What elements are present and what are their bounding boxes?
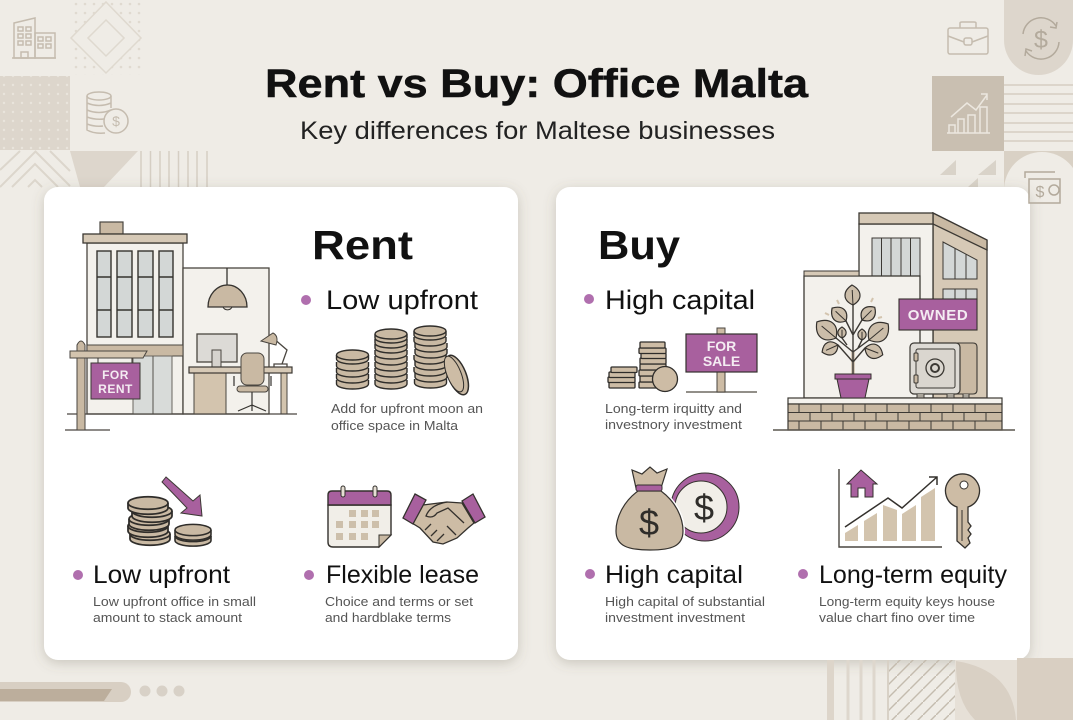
text: low upfront description — [331, 402, 483, 433]
text: long-term equity detail: value chart fino over time — [819, 611, 975, 625]
text: high capital description — [605, 402, 743, 432]
icon: money bag and dollar coin — [616, 467, 739, 550]
icon: calendar — [328, 486, 391, 547]
text: flexible lease detail — [325, 595, 474, 625]
text: low upfront description: Add for upfront moon an — [331, 402, 483, 416]
icon: cash note with coin — [1025, 172, 1060, 203]
icon: property value chart — [839, 469, 942, 547]
heading: buy: Buy — [598, 222, 680, 268]
text: low upfront description: office space in Malta — [331, 419, 458, 433]
icon: briefcase — [948, 22, 988, 54]
icon: key — [946, 474, 980, 548]
text: high capital description: Long-term irquitty and — [605, 402, 742, 416]
icon: money bag and dollar coin: $ — [694, 487, 714, 528]
icon: growth chart — [947, 94, 990, 133]
text: high capital detail: High capital of substantial — [605, 595, 765, 609]
icon: three coin stacks — [336, 326, 473, 398]
card: rent panel — [44, 187, 518, 660]
icon: handshake — [403, 494, 485, 544]
illustration: rented office building — [65, 222, 297, 430]
bullet: long-term equity: Long-term equity — [819, 561, 1007, 589]
text: low upfront detail: Low upfront office in small — [93, 595, 256, 609]
bullet: high capital (top): High capital — [605, 285, 755, 315]
icon: coins with dollar: $ — [112, 113, 120, 129]
sign: owned: OWNED — [908, 307, 968, 324]
icon: coins with falling arrow — [128, 477, 211, 546]
icon: dollar with circular arrows: $ — [1034, 26, 1048, 54]
icon: office buildings — [12, 18, 56, 58]
decoration: bottom left bar and dots — [0, 682, 184, 702]
subtitle: Key differences for Maltese businesses — [300, 117, 775, 145]
bullet: flexible lease: Flexible lease — [326, 561, 479, 589]
sign: for sale — [686, 328, 757, 392]
text: flexible lease detail: and hardblake terms — [325, 611, 451, 625]
text: high capital detail: investment investment — [605, 611, 746, 625]
text: long-term equity detail — [819, 595, 995, 625]
sign: owned — [899, 299, 977, 330]
icon: safe — [910, 343, 977, 398]
text: low upfront detail: amount to stack amount — [93, 611, 243, 625]
sign: for sale: SALE — [703, 353, 740, 369]
decoration: bottom right pattern — [827, 658, 1073, 720]
icon: stacked coins — [608, 342, 678, 392]
sign: for rent: RENT — [98, 382, 133, 396]
background decoration: top right — [932, 0, 1073, 228]
illustration: potted plant — [811, 285, 894, 398]
bullet: low upfront (bottom): Low upfront — [93, 561, 230, 589]
icon: coins with dollar — [87, 92, 128, 133]
title: Rent vs Buy: Office Malta — [265, 62, 809, 106]
background decoration: top left — [0, 0, 207, 187]
bullet: high capital (bottom): High capital — [605, 561, 743, 589]
sign: for rent — [91, 363, 140, 399]
heading: rent: Rent — [312, 222, 413, 268]
text: long-term equity detail: Long-term equity keys house — [819, 595, 995, 609]
text: flexible lease detail: Choice and terms or set — [325, 595, 474, 609]
sign: for rent: FOR — [102, 368, 129, 382]
sign: for sale: FOR — [707, 338, 736, 354]
text: low upfront detail — [93, 595, 256, 625]
illustration: owned building — [773, 213, 1015, 430]
bullet: low upfront (top): Low upfront — [326, 285, 479, 315]
card: buy panel — [556, 187, 1030, 660]
icon: money bag and dollar coin: $ — [639, 502, 659, 543]
text: high capital description: investnory investment — [605, 418, 743, 432]
text: high capital detail — [605, 595, 765, 625]
icon: cash note with coin: $ — [1036, 184, 1045, 201]
icon: dollar with circular arrows — [1023, 18, 1059, 59]
